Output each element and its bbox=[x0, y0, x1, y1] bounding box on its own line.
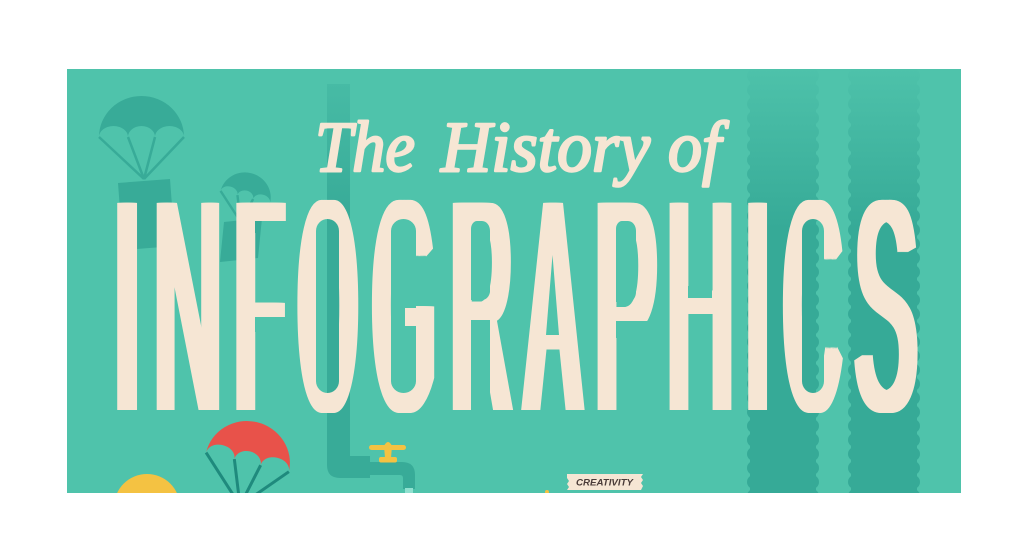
heading: The History of: of bbox=[668, 107, 730, 187]
column top fade bbox=[747, 69, 920, 174]
heading: The History of: The bbox=[315, 107, 415, 187]
heading: INFOGRAPHICS: F bbox=[230, 138, 277, 474]
heading: INFOGRAPHICS: N bbox=[149, 138, 217, 474]
heading: The History of bbox=[315, 107, 730, 187]
icon: red parachute bbox=[205, 421, 290, 493]
heading: INFOGRAPHICS: C bbox=[779, 138, 834, 474]
scalloped column right bbox=[848, 115, 920, 493]
heading: The History of: History bbox=[440, 107, 650, 187]
icon: small parachute with box bbox=[220, 172, 271, 262]
teal poster background bbox=[67, 69, 961, 493]
heading: INFOGRAPHICS bbox=[117, 200, 918, 413]
icon: large parachute with box bbox=[99, 96, 184, 250]
heading: INFOGRAPHICS: A bbox=[521, 138, 573, 474]
scalloped column left bbox=[747, 115, 819, 493]
icon: yellow tap valve bbox=[369, 442, 406, 462]
heading: INFOGRAPHICS: S bbox=[850, 138, 911, 474]
creativity tag: CREATIVITY bbox=[576, 478, 634, 488]
heading: INFOGRAPHICS: G bbox=[368, 138, 428, 474]
background illustrations bbox=[98, 84, 920, 493]
creativity tag bbox=[567, 474, 643, 490]
heading: INFOGRAPHICS: I bbox=[108, 138, 135, 474]
small yellow dot bbox=[545, 490, 549, 493]
heading: INFOGRAPHICS: P bbox=[590, 138, 652, 474]
heading: INFOGRAPHICS: H bbox=[662, 138, 728, 474]
icon: yellow circle bbox=[117, 474, 177, 493]
heading: INFOGRAPHICS: O bbox=[294, 138, 349, 474]
heading: INFOGRAPHICS: I bbox=[739, 138, 766, 474]
heading: INFOGRAPHICS: R bbox=[446, 138, 505, 474]
icon: water pipe and tap bbox=[327, 84, 415, 494]
